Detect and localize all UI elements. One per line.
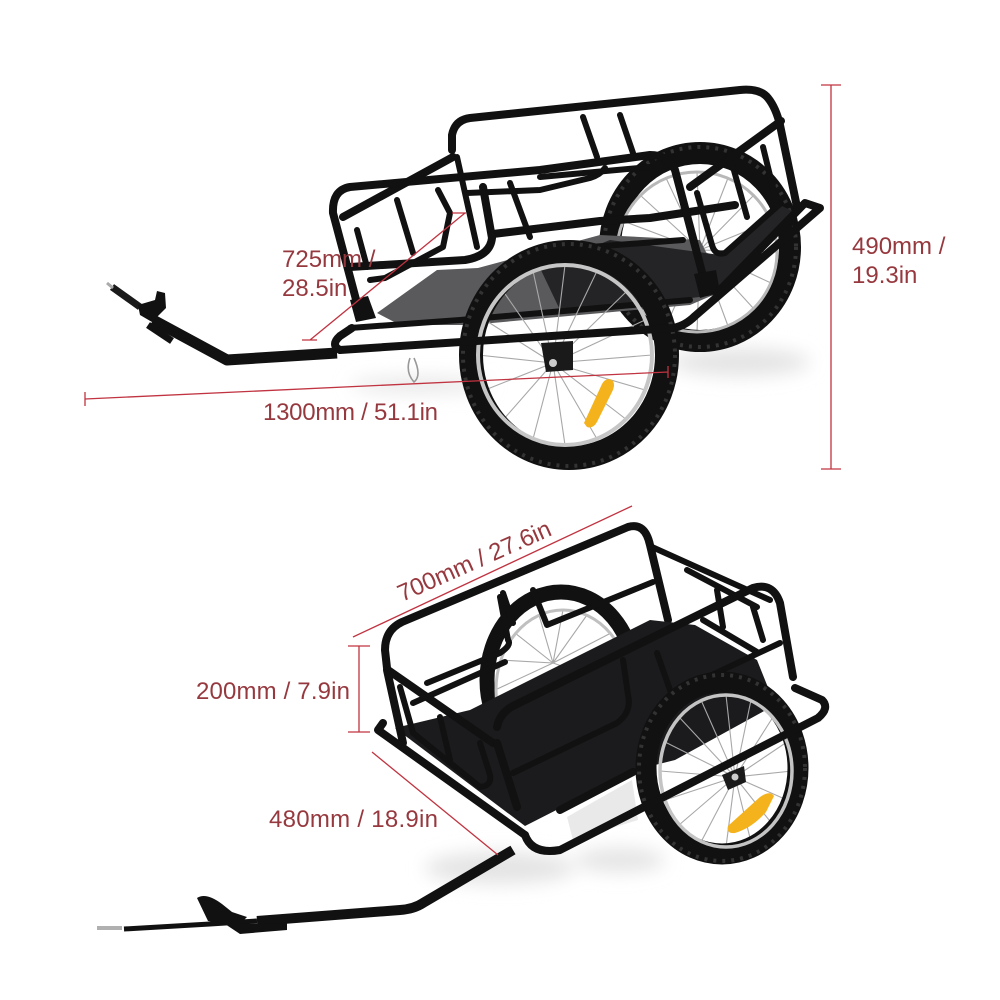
far wheel — [487, 592, 635, 770]
far rail — [452, 90, 797, 254]
dimension: 200mm: 200mm / 7.9in — [196, 678, 350, 705]
dimension: 700mm: 700mm / 27.6in — [393, 516, 556, 607]
front wheel — [463, 244, 675, 466]
bottom trailer: angled view — [97, 526, 825, 934]
tongue — [97, 850, 513, 934]
floor shadows — [350, 348, 810, 884]
dimension: height 490mm: 490mm / — [852, 233, 946, 260]
dimension: 700mm — [353, 506, 632, 637]
yellow reflector — [728, 793, 774, 833]
dimension: width 725mm: 725mm / — [282, 246, 376, 273]
dimension: 200mm — [196, 646, 370, 732]
dimension: 480mm — [269, 752, 498, 855]
cargo floor — [377, 235, 725, 325]
lower frame tube — [350, 300, 690, 328]
dimension: width 725mm — [282, 213, 466, 340]
left end frame — [387, 670, 493, 787]
near rail — [497, 587, 793, 807]
wheel floor window — [567, 780, 638, 840]
rear wheel — [604, 147, 796, 347]
near end frame — [343, 157, 477, 280]
far end frame — [690, 121, 781, 187]
right end frame — [657, 570, 780, 693]
main frame bar — [525, 688, 825, 851]
dimension: height 490mm: 19.3in — [852, 262, 917, 289]
dimension: length 1300mm — [85, 366, 668, 426]
dimension: height 490mm — [821, 85, 946, 469]
yellow reflector — [584, 379, 614, 427]
axle bracket — [722, 766, 746, 790]
hitch arm — [107, 283, 337, 360]
hitch pin — [408, 358, 418, 382]
cargo frame — [378, 723, 633, 835]
dimension: length 1300mm: 1300mm / 51.1in — [263, 399, 438, 426]
dark floor shading — [540, 205, 796, 310]
near wheel — [639, 675, 805, 861]
dimension: width 725mm: 28.5in — [282, 275, 347, 302]
top trailer: side view — [107, 90, 820, 466]
far rail — [385, 526, 770, 703]
cargo floor — [395, 620, 775, 826]
near inner rail — [513, 660, 629, 773]
axle bracket — [541, 341, 573, 372]
near rail — [333, 155, 720, 322]
dimension: 480mm: 480mm / 18.9in — [269, 806, 438, 833]
main frame bar — [335, 203, 820, 350]
